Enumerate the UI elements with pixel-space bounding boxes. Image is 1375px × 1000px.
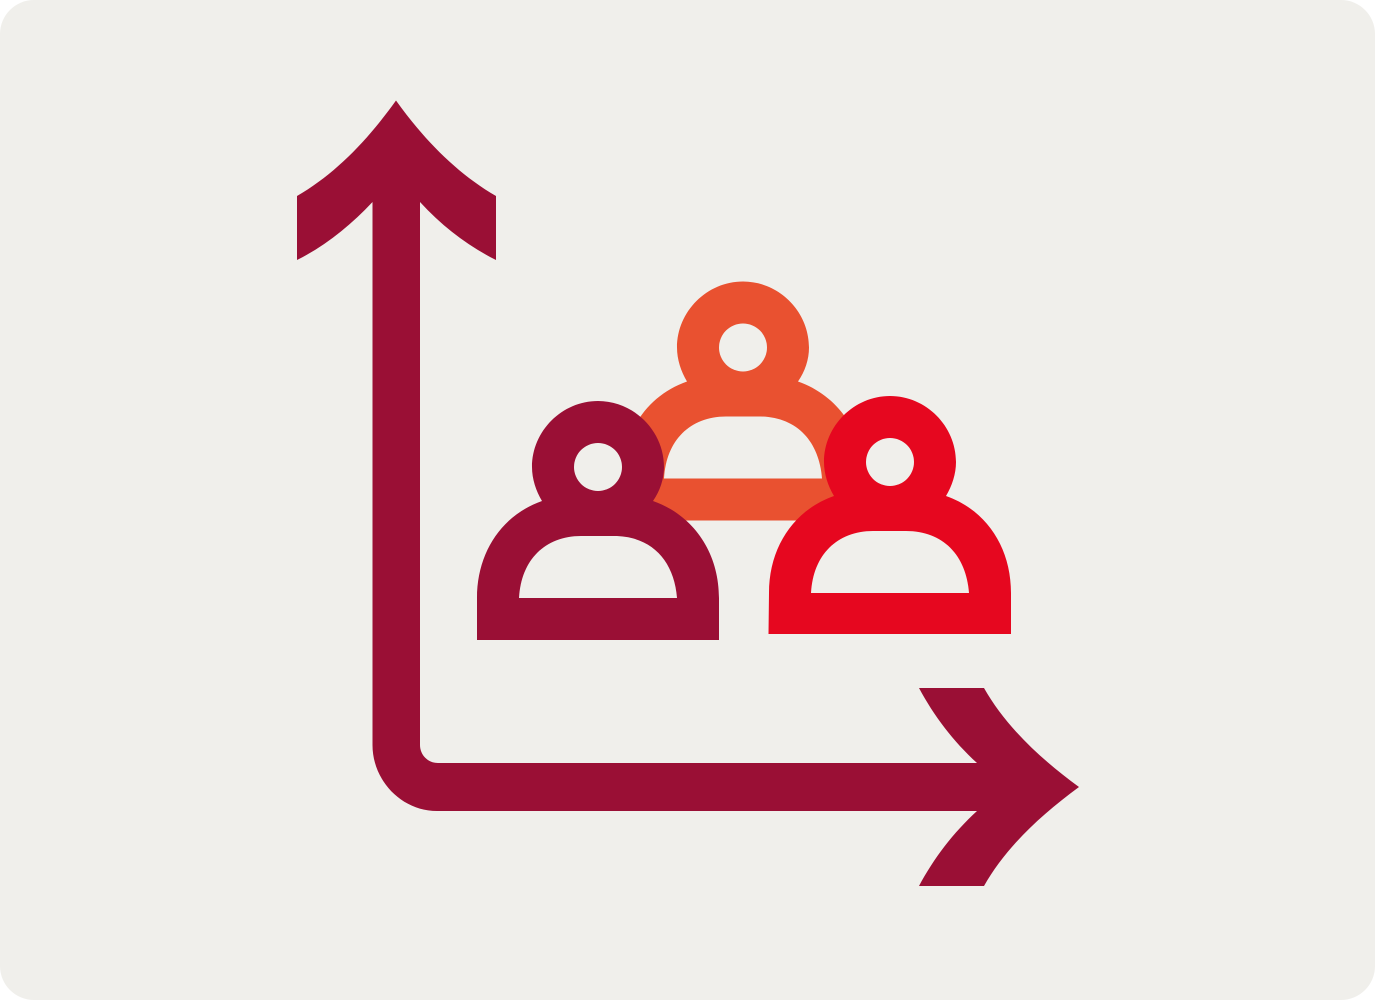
icon: person bright red xyxy=(768,396,1011,634)
icon: person orange xyxy=(622,282,864,520)
icon: person dark red xyxy=(477,401,719,640)
arrow: axes xyxy=(297,100,1079,886)
